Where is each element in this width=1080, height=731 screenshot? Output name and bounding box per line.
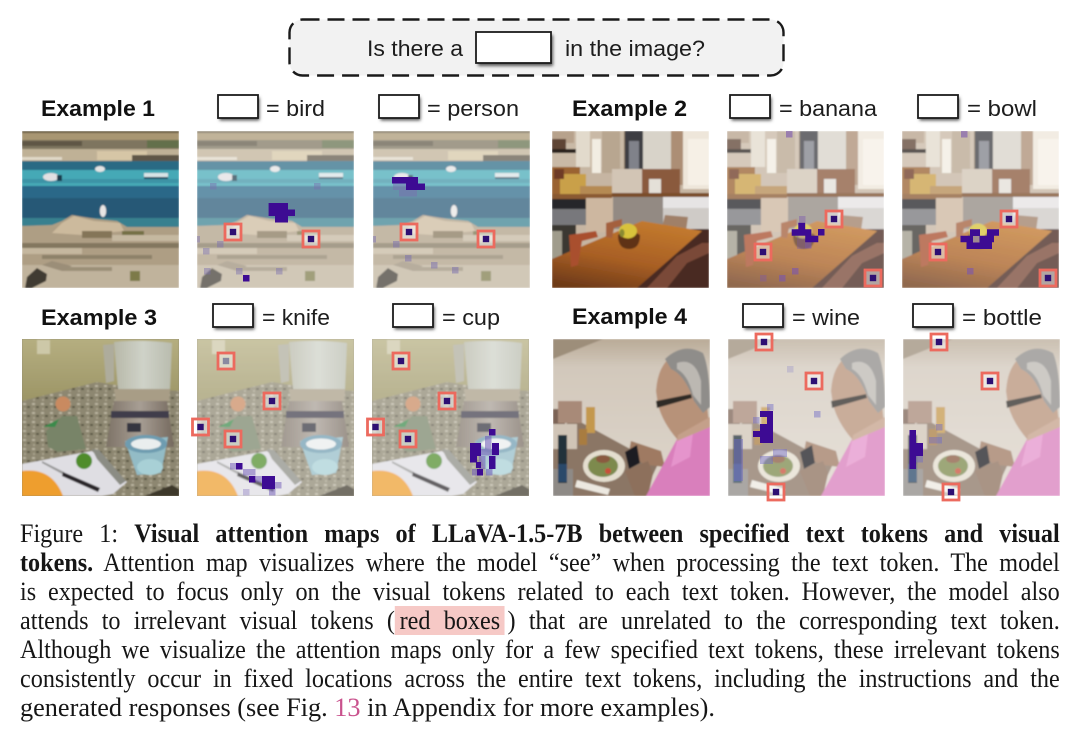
- attention marks on cup: [470, 429, 499, 476]
- figure caption: Although we visualize the attention maps only for a few specified text tokens, these irrelevant tokens: [20, 635, 1060, 664]
- red box: irrelevant token: [756, 334, 772, 350]
- token label: person: = person: [427, 96, 519, 121]
- red box: irrelevant token: [982, 373, 998, 389]
- red box: irrelevant token: [1040, 270, 1056, 286]
- red box: irrelevant token: [478, 231, 494, 247]
- attention map: knife: [192, 339, 354, 496]
- attention map: wine: [728, 334, 885, 500]
- attention blob on boat: [392, 177, 425, 190]
- attention blob on banana: [792, 223, 818, 242]
- prompt text end: in the image?: [565, 36, 705, 61]
- red box: irrelevant token: [401, 224, 417, 240]
- heading: Example 4: Example 4: [572, 304, 688, 329]
- attention map: person: [373, 131, 530, 288]
- red box: irrelevant token: [368, 419, 384, 435]
- attention map: bird: [197, 131, 354, 288]
- red box: irrelevant token: [865, 270, 881, 286]
- token label: person: [379, 95, 519, 121]
- token label: cup: [393, 304, 500, 330]
- red box: irrelevant token: [303, 231, 319, 247]
- red box: irrelevant token: [806, 373, 822, 389]
- heading: Example 1: Example 1: [41, 96, 155, 121]
- attention map: bottle: [903, 334, 1060, 500]
- question banner: [290, 20, 784, 76]
- red box: irrelevant token: [264, 393, 280, 409]
- attention map: banana: [727, 131, 884, 288]
- red box: irrelevant token: [400, 431, 416, 447]
- red box: irrelevant token: [192, 419, 208, 435]
- blank token box: [476, 32, 553, 66]
- dashed prompt frame: [290, 20, 784, 76]
- token label: wine: = wine: [792, 305, 860, 330]
- red box: irrelevant token: [930, 244, 946, 260]
- token label: banana: [730, 95, 878, 121]
- red box: irrelevant token: [1001, 211, 1017, 227]
- token label: wine: [743, 304, 860, 330]
- heading: Example 3: Example 3: [41, 305, 157, 330]
- photo: Example 1 sea and bird: [22, 131, 179, 288]
- attention map: bowl: [902, 131, 1059, 288]
- red box: irrelevant token: [225, 431, 241, 447]
- photo: Example 3 blender and cutting board: [22, 339, 179, 496]
- prompt text start: Is there a: [367, 36, 464, 61]
- figure caption: consistently occur in fixed locations across the entire text tokens, including the instructions and the: [20, 664, 1060, 693]
- attention blob on bottle: [910, 430, 923, 469]
- token label: bird: = bird: [266, 96, 325, 121]
- token label: knife: = knife: [262, 305, 330, 330]
- token label: bowl: [918, 95, 1037, 121]
- red box: irrelevant token: [943, 484, 959, 500]
- heading: Example 2: Example 2: [572, 96, 687, 121]
- token label: bird: [218, 95, 325, 121]
- red box: irrelevant token: [393, 353, 409, 369]
- token label: cup: = cup: [442, 305, 500, 330]
- red box: irrelevant token: [768, 484, 784, 500]
- figure caption: attends to irrelevant visual tokens (red boxes ) that are unrelated to the corresponding text token.: [20, 606, 1060, 635]
- attention blob on bowl: [960, 229, 999, 249]
- photo: Example 2 kitchen: [552, 131, 709, 288]
- figure caption: Figure 1: Visual attention maps of LLaVA-1.5-7B between specified text tokens and visual: [20, 519, 1060, 548]
- attention blob on wine glass: [753, 411, 773, 443]
- red box: irrelevant token: [439, 393, 455, 409]
- red box: irrelevant token: [931, 334, 947, 350]
- photo: Example 4 man with phone at table: [553, 339, 710, 496]
- attention marks on knife: [236, 463, 275, 489]
- token label: bottle: [913, 304, 1042, 330]
- red box: irrelevant token: [225, 224, 241, 240]
- figure caption: is expected to focus only on the visual tokens related to each text token. However, the model also: [20, 577, 1060, 606]
- token label: knife: [213, 304, 330, 330]
- figure caption: generated responses (see Fig. 13 in Appendix for more examples).: [20, 693, 715, 722]
- red box: irrelevant token: [218, 353, 234, 369]
- figure caption: [20, 519, 1060, 722]
- figure caption: tokens. Attention map visualizes where the model “see” when processing the text token. The model: [20, 548, 1060, 577]
- token label: banana: = banana: [779, 96, 878, 121]
- attention blob on bird: [269, 203, 295, 222]
- token label: bowl: = bowl: [967, 96, 1037, 121]
- red box: irrelevant token: [826, 211, 842, 227]
- token label: bottle: = bottle: [962, 305, 1042, 330]
- red box: irrelevant token: [755, 244, 771, 260]
- attention map: cup: [368, 339, 529, 496]
